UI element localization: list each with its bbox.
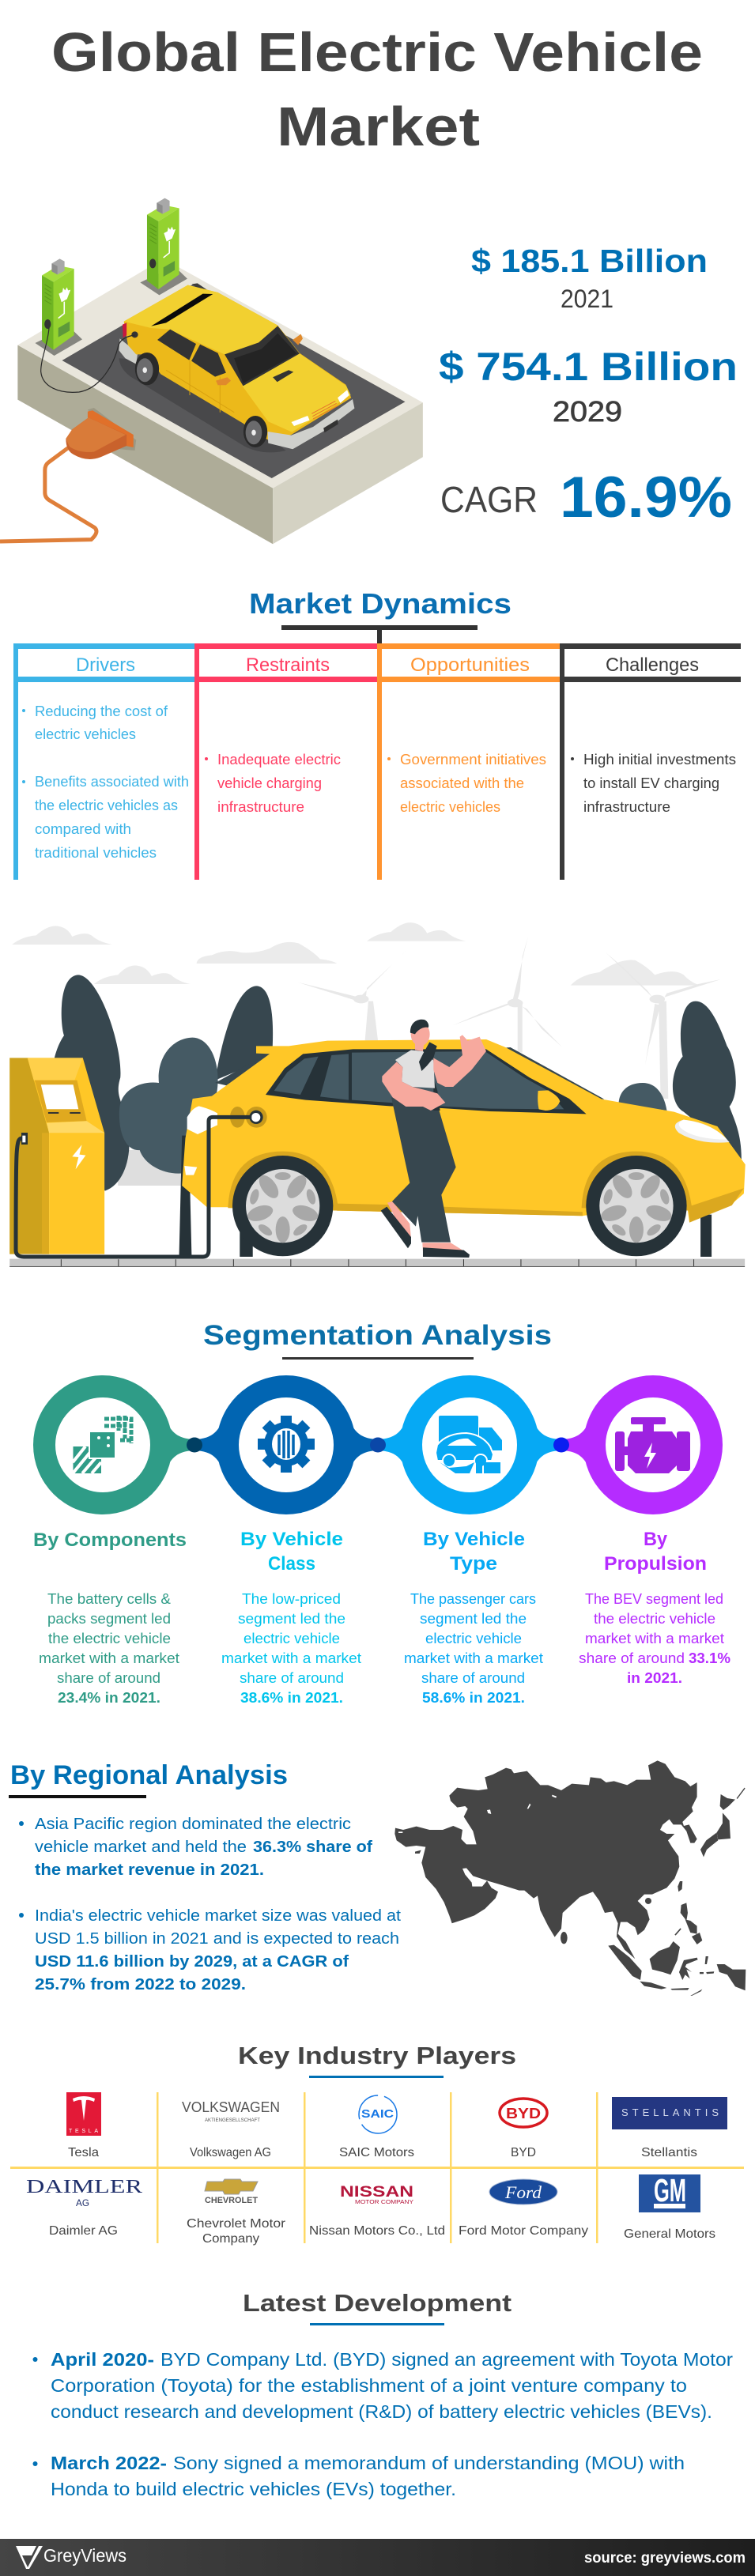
bullet: March 2022: Honda to build electric vehicles (EVs) together. xyxy=(51,2479,456,2499)
2021 value xyxy=(471,243,708,313)
2021 value: 2021 xyxy=(561,285,613,313)
logo: Tesla: TESLA xyxy=(69,2129,98,2134)
bullet: April 2020 xyxy=(33,2349,733,2422)
ground xyxy=(9,1259,745,1267)
propulsion description: the electric vehicle xyxy=(594,1611,715,1627)
logo: Stellantis xyxy=(612,2097,727,2129)
company names: Nissan Motors Co., Ltd xyxy=(309,2224,445,2238)
2029 value: 2029 xyxy=(553,395,622,428)
heading: regional analysis: By Regional Analysis xyxy=(10,1760,288,1790)
icon: battery cells xyxy=(73,1416,131,1473)
heading: segmentation analysis xyxy=(203,1320,552,1360)
logo: Volkswagen: VOLKSWAGEN xyxy=(182,2099,280,2115)
vehicle type description: segment led the xyxy=(420,1611,527,1627)
segment: by propulsion xyxy=(579,1529,730,1686)
footer bar xyxy=(0,2539,755,2576)
company names: SAIC Motors xyxy=(339,2146,414,2159)
panel: challenges xyxy=(560,643,741,880)
bullet: March 2022 xyxy=(33,2453,685,2499)
rear light xyxy=(184,1106,217,1175)
company names: BYD xyxy=(511,2146,536,2159)
yellow car xyxy=(119,285,354,449)
illustration: isometric EV charging platform xyxy=(0,198,423,544)
segment: by vehicle type xyxy=(404,1529,543,1706)
bullet: India: USD 11.6 billion by 2029, at a CAGR of xyxy=(35,1953,349,1971)
bullet: March 2022: Sony signed a memorandum of understanding (MOU) with xyxy=(173,2453,685,2473)
restraints heading: Restraints xyxy=(246,654,330,676)
company names: Volkswagen AG xyxy=(190,2146,271,2159)
bullet: April 2020: Corporation (Toyota) for the establishment of a joint venture company to xyxy=(51,2375,687,2396)
components description: the electric vehicle xyxy=(48,1631,171,1646)
heading: segmentation analysis: Segmentation Analysis xyxy=(203,1320,552,1351)
CAGR: 16.9% xyxy=(560,466,732,530)
vehicle type description: share of around xyxy=(421,1670,525,1686)
bullet: March 2022: March 2022- xyxy=(51,2453,167,2473)
title: Market xyxy=(277,96,480,157)
orange plug and cable xyxy=(0,408,136,541)
company names: Company xyxy=(202,2232,259,2246)
opportunities list: electric vehicles xyxy=(400,799,500,815)
challenges list: infrastructure xyxy=(583,799,670,815)
drivers list xyxy=(22,703,189,861)
components description: 23.4% in 2021. xyxy=(58,1690,160,1706)
propulsion description: The BEV segment led xyxy=(585,1591,723,1607)
2029 value xyxy=(439,345,738,428)
company names xyxy=(49,2146,715,2246)
drivers list: Reducing the cost of xyxy=(35,703,168,719)
bullet: India xyxy=(19,1907,401,1993)
restraints list xyxy=(205,752,341,815)
segment: by vehicle class: Class xyxy=(268,1553,315,1575)
drivers list: electric vehicles xyxy=(35,726,136,742)
logo: Nissan xyxy=(340,2184,413,2205)
segment: by propulsion: Propulsion xyxy=(604,1553,707,1575)
vehicle class description: 38.6% in 2021. xyxy=(240,1690,343,1706)
segment: by vehicle class xyxy=(221,1529,361,1706)
panel: drivers xyxy=(13,643,194,880)
vehicle type description xyxy=(404,1591,543,1706)
icon: truck, car and hand xyxy=(436,1416,502,1473)
bullet: Asia Pacific: vehicle market and held the xyxy=(35,1839,247,1856)
company names: Tesla xyxy=(68,2146,99,2159)
vehicle class description: share of around xyxy=(240,1670,344,1686)
opportunities list: Government initiatives xyxy=(400,752,546,768)
grid lines xyxy=(10,2092,744,2243)
title xyxy=(51,21,703,157)
woman xyxy=(381,1020,486,1258)
propulsion description: 33.1% xyxy=(689,1650,730,1666)
company names: General Motors xyxy=(624,2227,715,2241)
propulsion description: in 2021. xyxy=(627,1670,682,1686)
propulsion description xyxy=(579,1591,730,1686)
drivers list: traditional vehicles xyxy=(35,845,157,861)
CAGR xyxy=(440,466,732,530)
logo: Stellantis: STELLANTIS xyxy=(621,2106,719,2118)
bullet: India: USD 1.5 billion in 2021 and is expected to reach xyxy=(35,1930,399,1948)
latest development text xyxy=(33,2349,733,2499)
bullet: India: India's electric vehicle market size was valued at xyxy=(35,1907,401,1925)
vehicle class description: segment led the xyxy=(238,1611,345,1627)
wind turbines xyxy=(297,936,721,1099)
drivers list: the electric vehicles as xyxy=(35,798,178,813)
restraints list: Inadequate electric xyxy=(217,752,341,768)
car windows xyxy=(266,1049,587,1114)
bullet: Asia Pacific xyxy=(19,1816,372,1879)
logo: SAIC xyxy=(359,2095,397,2133)
title: Global Electric Vehicle xyxy=(51,21,703,83)
connector dots xyxy=(187,1437,569,1453)
icon: gear with pencil xyxy=(258,1416,315,1473)
propulsion description: market with a market xyxy=(585,1631,724,1646)
logo: BYD xyxy=(500,2099,547,2127)
logo: Daimler xyxy=(26,2177,142,2208)
components description: market with a market xyxy=(39,1650,179,1666)
segment: by vehicle type: Type xyxy=(450,1553,497,1575)
drivers list: compared with xyxy=(35,821,131,837)
segment: by propulsion: By xyxy=(644,1529,668,1550)
vehicle type description: market with a market xyxy=(404,1650,543,1666)
bullet: Asia Pacific: the market revenue in 2021. xyxy=(35,1861,264,1879)
logo: Daimler: AG xyxy=(76,2197,89,2208)
heading: latest development xyxy=(243,2289,512,2325)
opportunities list: associated with the xyxy=(400,775,524,791)
ring: propulsion xyxy=(561,1375,723,1514)
drivers list: Benefits associated with xyxy=(35,774,189,790)
illustration: woman with yellow EV at charger xyxy=(9,922,746,1267)
bullet: India: 25.7% from 2022 to 2029. xyxy=(35,1976,246,1993)
segment: by components xyxy=(33,1529,187,1706)
components description: packs segment led xyxy=(47,1611,171,1627)
vehicle class description: market with a market xyxy=(221,1650,361,1666)
2029 value: $ 754.1 Billion xyxy=(439,345,738,389)
components description: share of around xyxy=(57,1670,160,1686)
ring: vehicle type xyxy=(378,1375,561,1514)
propulsion description: share of around xyxy=(579,1650,685,1666)
heading: key industry players: Key Industry Players xyxy=(238,2042,516,2069)
car windows, wheels, hose and woman xyxy=(16,1020,693,1258)
CAGR: CAGR xyxy=(440,479,538,520)
charge port and hose xyxy=(16,1107,267,1257)
logo: BYD: BYD xyxy=(506,2106,541,2122)
logo: Volkswagen: AKTIENGESELLSCHAFT xyxy=(205,2118,260,2123)
GreyViews logo: GreyViews xyxy=(43,2545,126,2566)
logo: Chevrolet xyxy=(205,2179,258,2205)
market size figures xyxy=(439,243,738,530)
logo: Ford xyxy=(489,2179,557,2204)
vehicle type description: 58.6% in 2021. xyxy=(422,1690,525,1706)
logo: Daimler: DAIMLER xyxy=(26,2177,142,2197)
restraints list: vehicle charging xyxy=(217,775,322,791)
icon: engine with bolt xyxy=(615,1417,690,1473)
ring: components xyxy=(33,1375,194,1514)
panel: opportunities xyxy=(377,643,560,880)
bullet: Asia Pacific: 36.3% share of xyxy=(253,1839,372,1856)
segment: by components: By Components xyxy=(33,1529,187,1551)
chain of segment rings xyxy=(33,1375,723,1514)
GreyViews logo xyxy=(16,2545,126,2569)
segment: by vehicle type: By Vehicle xyxy=(423,1529,525,1550)
heading: market dynamics: Market Dynamics xyxy=(249,587,512,620)
company grid xyxy=(10,2092,744,2246)
back charger xyxy=(140,198,187,295)
vehicle class description xyxy=(221,1591,361,1706)
challenges list xyxy=(571,752,736,815)
background scene and station xyxy=(9,922,746,1267)
challenges list: to install EV charging xyxy=(583,775,719,791)
components description: The battery cells & xyxy=(47,1591,171,1607)
challenges heading: Challenges xyxy=(606,654,699,676)
car body xyxy=(182,1039,746,1223)
bullet: April 2020: April 2020- xyxy=(51,2349,154,2370)
front charger xyxy=(35,258,82,356)
charging cable xyxy=(41,328,134,392)
map: Asia Pacific xyxy=(394,1760,746,1996)
opportunities heading: Opportunities xyxy=(410,654,530,676)
bullet: April 2020: BYD Company Ltd. (BYD) signed an agreement with Toyota Motor xyxy=(160,2349,733,2370)
regional analysis text xyxy=(19,1816,401,1993)
clouds xyxy=(12,922,700,986)
logo: Nissan: MOTOR COMPANY xyxy=(355,2200,413,2205)
wheel: rear xyxy=(228,1152,338,1256)
source credit: source: greyviews.com xyxy=(584,2550,746,2567)
company names: Chevrolet Motor xyxy=(187,2217,286,2231)
logo: Chevrolet: CHEVROLET xyxy=(205,2196,258,2205)
vehicle class description: The low-priced xyxy=(242,1591,341,1607)
logo: Nissan: NISSAN xyxy=(340,2184,413,2201)
components description xyxy=(39,1591,179,1706)
ring: vehicle class xyxy=(194,1375,378,1514)
bullet: April 2020: conduct research and development (R&D) of battery electric vehicles (BEVs). xyxy=(51,2401,712,2422)
wheel: front xyxy=(582,1152,693,1256)
panel: restraints xyxy=(194,643,377,880)
heading: market dynamics xyxy=(249,587,512,644)
vehicle type description: electric vehicle xyxy=(425,1631,522,1646)
logo: GM: GM xyxy=(654,2172,686,2208)
logo: Tesla xyxy=(66,2092,101,2136)
logo: Volkswagen xyxy=(182,2099,280,2123)
restraints list: infrastructure xyxy=(217,799,304,815)
company names: Ford Motor Company xyxy=(459,2224,588,2238)
drivers heading: Drivers xyxy=(76,654,135,676)
2021 value: $ 185.1 Billion xyxy=(471,243,708,279)
logo: GM xyxy=(639,2172,700,2212)
opportunities list xyxy=(387,752,546,815)
logo: Ford: Ford xyxy=(504,2182,542,2202)
vehicle class description: electric vehicle xyxy=(243,1631,340,1646)
platform base xyxy=(17,258,423,544)
segment: by vehicle class: By Vehicle xyxy=(240,1529,343,1550)
logo: SAIC: SAIC xyxy=(361,2107,394,2121)
bullet: Asia Pacific: Asia Pacific region dominated the electric xyxy=(35,1816,351,1833)
vehicle type description: The passenger cars xyxy=(410,1591,536,1607)
challenges list: High initial investments xyxy=(583,752,736,768)
heading: latest development: Latest Development xyxy=(243,2289,512,2317)
trees xyxy=(51,975,742,1257)
heading: key industry players xyxy=(238,2042,516,2078)
charging station xyxy=(9,1058,104,1254)
company names: Stellantis xyxy=(641,2146,697,2159)
company names: Daimler AG xyxy=(49,2224,118,2238)
